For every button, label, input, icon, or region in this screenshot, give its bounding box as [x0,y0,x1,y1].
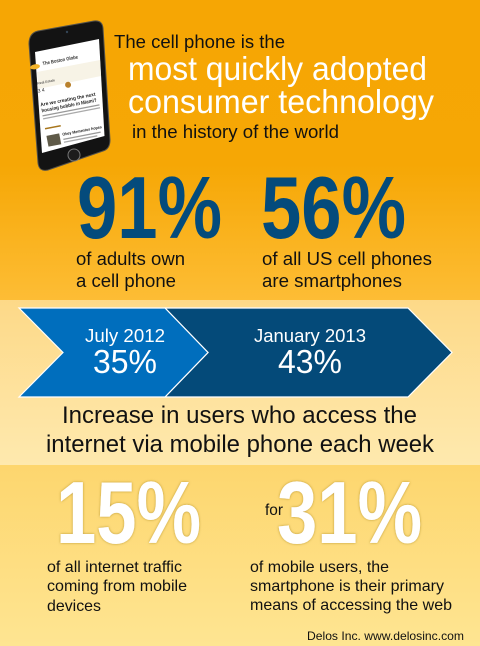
value: 35%: 35% [93,343,157,380]
text: smartphones caption: of all US cell phones [262,249,432,269]
phone screen content: Obey Mementos hopes [62,124,103,137]
text: primary means caption: smartphone is their primary [250,578,444,595]
text: for: for [265,502,284,519]
text: smartphones caption: are smartphones [262,271,402,291]
text: increase caption: Increase in users who access the [62,402,417,429]
label: January 2013: January 2013 [254,325,366,346]
phone screen content: housing bubble in Miami? [41,98,97,114]
value: 43%: 43% [278,343,342,380]
phone screen content [29,52,105,147]
text: adults caption: of adults own [76,249,185,269]
stat: 56%: 56% [261,158,406,257]
text: adults caption: a cell phone [76,271,176,291]
phone screen content: The Boston Globe [42,54,79,67]
arrow: July 2012 [19,308,208,397]
phone screen content: Are we creating the next [40,92,96,108]
label: July 2012: July 2012 [85,325,165,346]
phone screen content: 3 4 [37,87,45,95]
text: traffic caption: coming from mobile [47,578,187,595]
stat: 31%: 31% [277,463,422,562]
phone screen content: Real Estate [37,78,55,86]
background: yellow bottom section [0,465,480,646]
stat: 91%: 91% [77,158,222,257]
heading: most quickly adopted: most quickly adopted [128,50,427,87]
stat: 15%: 15% [56,463,201,562]
heading: consumer technology: consumer technology [128,83,434,120]
text: intro line: The cell phone is the [114,32,285,52]
text: traffic caption: of all internet traffic [47,559,182,576]
text: source credit: Delos Inc. www.delosinc.com [307,629,464,643]
background: pale middle band [0,300,480,465]
text: traffic caption: devices [47,598,101,615]
arrow: January 2013 [165,308,452,397]
text: primary means caption: of mobile users, the [250,559,389,576]
text: primary means caption: means of accessing the web [250,597,452,614]
background: orange top section [0,0,480,300]
icon: smartphone [29,21,110,170]
text: increase caption: internet via mobile phone each week [46,431,435,458]
text: in the history of the world: in the history of the world [132,122,339,142]
